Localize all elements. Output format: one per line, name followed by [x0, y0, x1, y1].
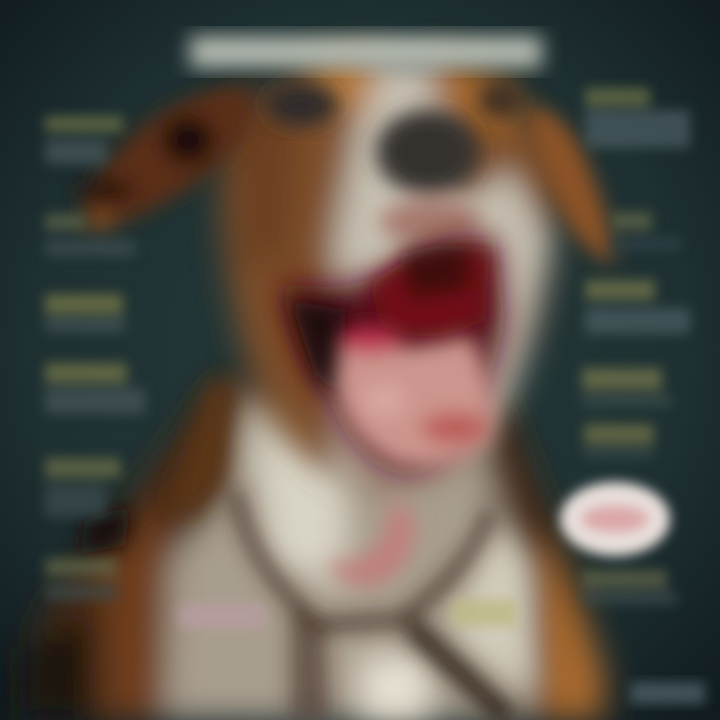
left labels column — [45, 116, 145, 600]
left ear — [75, 85, 250, 232]
left label 6 — [45, 558, 117, 600]
eyes — [266, 82, 522, 127]
right label 6 — [582, 570, 677, 604]
left label 3 — [45, 294, 125, 332]
head — [221, 50, 555, 490]
right labels column — [582, 88, 690, 604]
left label 2 — [45, 214, 135, 256]
right label 4 — [582, 368, 672, 406]
right ear — [525, 105, 612, 265]
left label 1 — [45, 116, 123, 164]
left label 4 — [45, 363, 145, 414]
right label 1 — [585, 88, 690, 148]
dark harness straps — [80, 380, 510, 720]
title bar — [190, 36, 542, 68]
dog body and chest — [20, 380, 610, 720]
right label 2 — [612, 212, 682, 250]
dog illustration — [20, 50, 612, 720]
white chest highlight — [250, 420, 535, 720]
pink tongue tip on chest — [325, 495, 415, 586]
callout badge — [560, 482, 670, 556]
right label 5 — [584, 424, 654, 458]
right label 3 — [585, 280, 690, 334]
open mouth — [280, 238, 505, 475]
corner badge — [630, 682, 705, 704]
left label 5 — [45, 458, 121, 517]
chest labels — [180, 600, 517, 628]
nose — [376, 110, 480, 244]
mouth interior — [290, 246, 490, 400]
chest label left — [180, 604, 265, 628]
chest label right — [452, 600, 517, 626]
tongue — [335, 326, 492, 467]
